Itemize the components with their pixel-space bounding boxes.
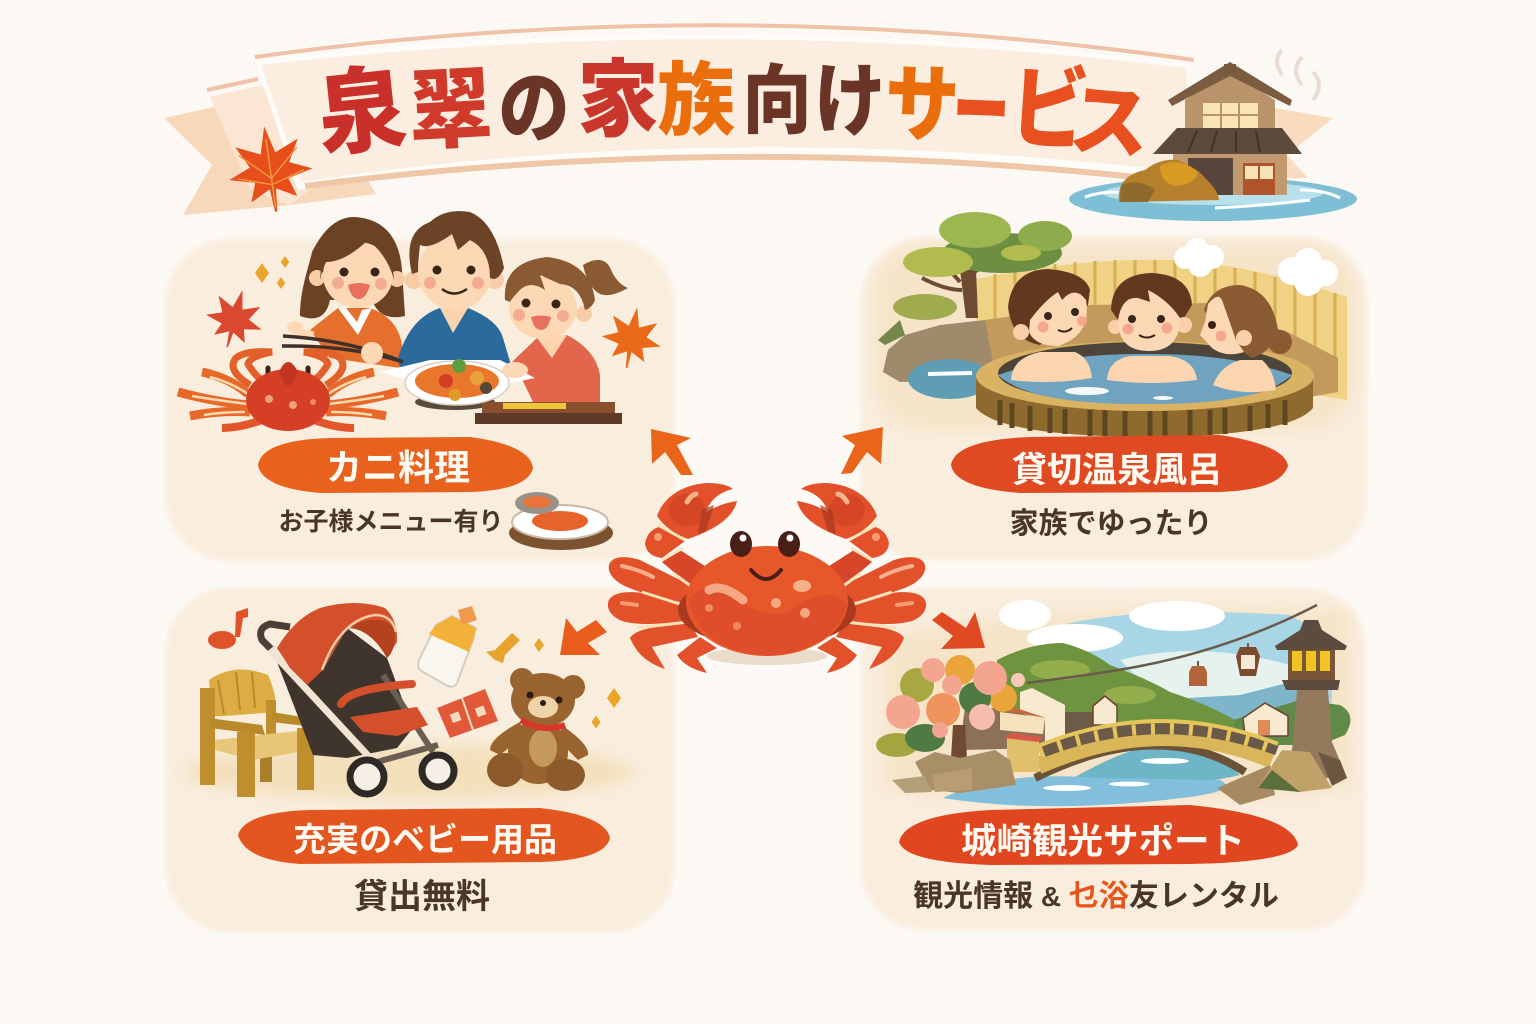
icon: music note [208, 608, 248, 649]
panel: crab cuisine [166, 211, 674, 561]
sub text: 観光情報 & 乜浴友レンタル [913, 880, 1279, 913]
shrub [893, 294, 957, 320]
sand wash [885, 608, 1352, 802]
left rocks [892, 750, 1016, 793]
title text: ビ [1007, 57, 1091, 163]
pond left [908, 359, 992, 399]
inner fold [210, 85, 315, 205]
sky [1050, 612, 1335, 730]
title text: 族 [657, 56, 735, 145]
icon: sparkles [534, 638, 621, 728]
tree [903, 212, 1072, 318]
man [398, 308, 511, 368]
chopsticks [282, 336, 403, 362]
teddy bear [487, 668, 588, 791]
eyes [730, 531, 800, 557]
title text: サ [883, 56, 961, 153]
banner second line [207, 79, 258, 90]
hanging lanterns [1027, 605, 1317, 686]
mini plate [509, 492, 613, 550]
banner band [261, 39, 1187, 182]
red book [437, 689, 498, 738]
body mottling [688, 588, 847, 656]
icon: ryokan on water [1069, 50, 1357, 221]
label text: カニ料理 [326, 447, 470, 488]
stroller [261, 603, 454, 794]
lower river [943, 776, 1226, 806]
distant mountains [1187, 683, 1310, 730]
right rocks [1217, 750, 1347, 805]
plate of food [405, 359, 509, 405]
title text: の [498, 64, 570, 154]
label pill [899, 805, 1298, 865]
label text: 城崎観光サポート [961, 821, 1245, 861]
smile [751, 570, 781, 579]
sand wash [875, 245, 1355, 430]
sky lower haze [1120, 651, 1330, 720]
panel background [166, 239, 674, 561]
wooden tray [475, 402, 622, 424]
title text: 向 [743, 60, 811, 144]
sub text: 家族でゆったり [1009, 507, 1213, 540]
cherry tree [876, 655, 1025, 758]
steam [1277, 50, 1319, 100]
panel: private onsen [861, 212, 1367, 560]
clouds of steam [1174, 238, 1338, 296]
stone lantern [1275, 620, 1347, 778]
river [1070, 745, 1240, 784]
sand wash [185, 745, 635, 799]
girl hand [502, 362, 528, 378]
title text: け [814, 57, 886, 147]
panel background [166, 588, 674, 932]
woman [300, 217, 405, 318]
title text: 家 [577, 53, 659, 147]
title banner [164, 25, 1357, 221]
label pill [258, 437, 533, 493]
sub text: 貸出無料 [354, 878, 490, 916]
bridge pier [1004, 733, 1042, 772]
banner top line [255, 25, 1194, 60]
label pill [951, 435, 1288, 493]
bowl shadow [415, 394, 495, 410]
hand [361, 342, 383, 364]
bamboo fence [972, 260, 1347, 400]
title text: ス [1066, 75, 1153, 170]
bather 3 [1213, 360, 1276, 392]
rocks [1119, 160, 1219, 202]
icon: maple leaf left [199, 283, 270, 355]
arrow: to crab cuisine [651, 429, 693, 475]
body [686, 546, 848, 656]
icon: sparkles [255, 256, 289, 289]
rocks [883, 320, 995, 382]
wooden chair [200, 670, 323, 797]
shadow [707, 647, 827, 665]
arrow: to baby goods [560, 618, 607, 655]
panel: baby goods [166, 588, 674, 932]
right green hill and bush [1233, 700, 1350, 745]
icon: red crab [178, 352, 398, 431]
label text: 充実のベビー用品 [293, 821, 557, 858]
left ribbon tail [164, 87, 376, 215]
green hill [997, 643, 1240, 740]
house awning [1153, 128, 1302, 154]
left limbs [608, 483, 737, 673]
bathers [1008, 269, 1292, 392]
white halo [652, 493, 882, 677]
arched bridge [1035, 721, 1278, 778]
panel: kinosaki sightseeing [861, 588, 1366, 930]
banner bottom line [305, 157, 1145, 186]
arrow: to onsen [841, 427, 883, 474]
wood deck [985, 303, 1338, 400]
icon: central crab [608, 483, 926, 677]
panel background [861, 238, 1367, 560]
napkin [380, 360, 535, 385]
icon: maple leaf [223, 121, 318, 218]
bather 2 [1107, 356, 1197, 383]
yellow arrow [486, 633, 520, 663]
body shadow [678, 573, 856, 647]
title text [312, 53, 1153, 170]
river highlights [1043, 758, 1189, 791]
label text: 貸切温泉風呂 [1012, 451, 1222, 490]
body highlights [705, 580, 811, 630]
panel background [861, 588, 1366, 930]
girl [583, 260, 628, 295]
icon: maple leaf right [597, 302, 667, 373]
bather 1 [1011, 352, 1092, 382]
sub text: お子様メニュー有り [278, 508, 504, 536]
water [1069, 177, 1357, 221]
label pill [238, 808, 610, 864]
right ribbon tail [1150, 80, 1333, 180]
house body [1173, 150, 1287, 195]
title text: ー [951, 64, 1011, 160]
title text: 翠 [406, 59, 495, 162]
arrow: to sightseeing [932, 612, 985, 649]
house roof [1168, 62, 1292, 106]
buildings [963, 688, 1288, 750]
clouds [999, 600, 1225, 652]
title text: 泉 [312, 57, 411, 169]
family [287, 211, 628, 402]
banner band white edge [255, 35, 1190, 190]
wooden tub [976, 341, 1314, 437]
right limbs [797, 483, 926, 673]
baby bottle [418, 606, 477, 687]
